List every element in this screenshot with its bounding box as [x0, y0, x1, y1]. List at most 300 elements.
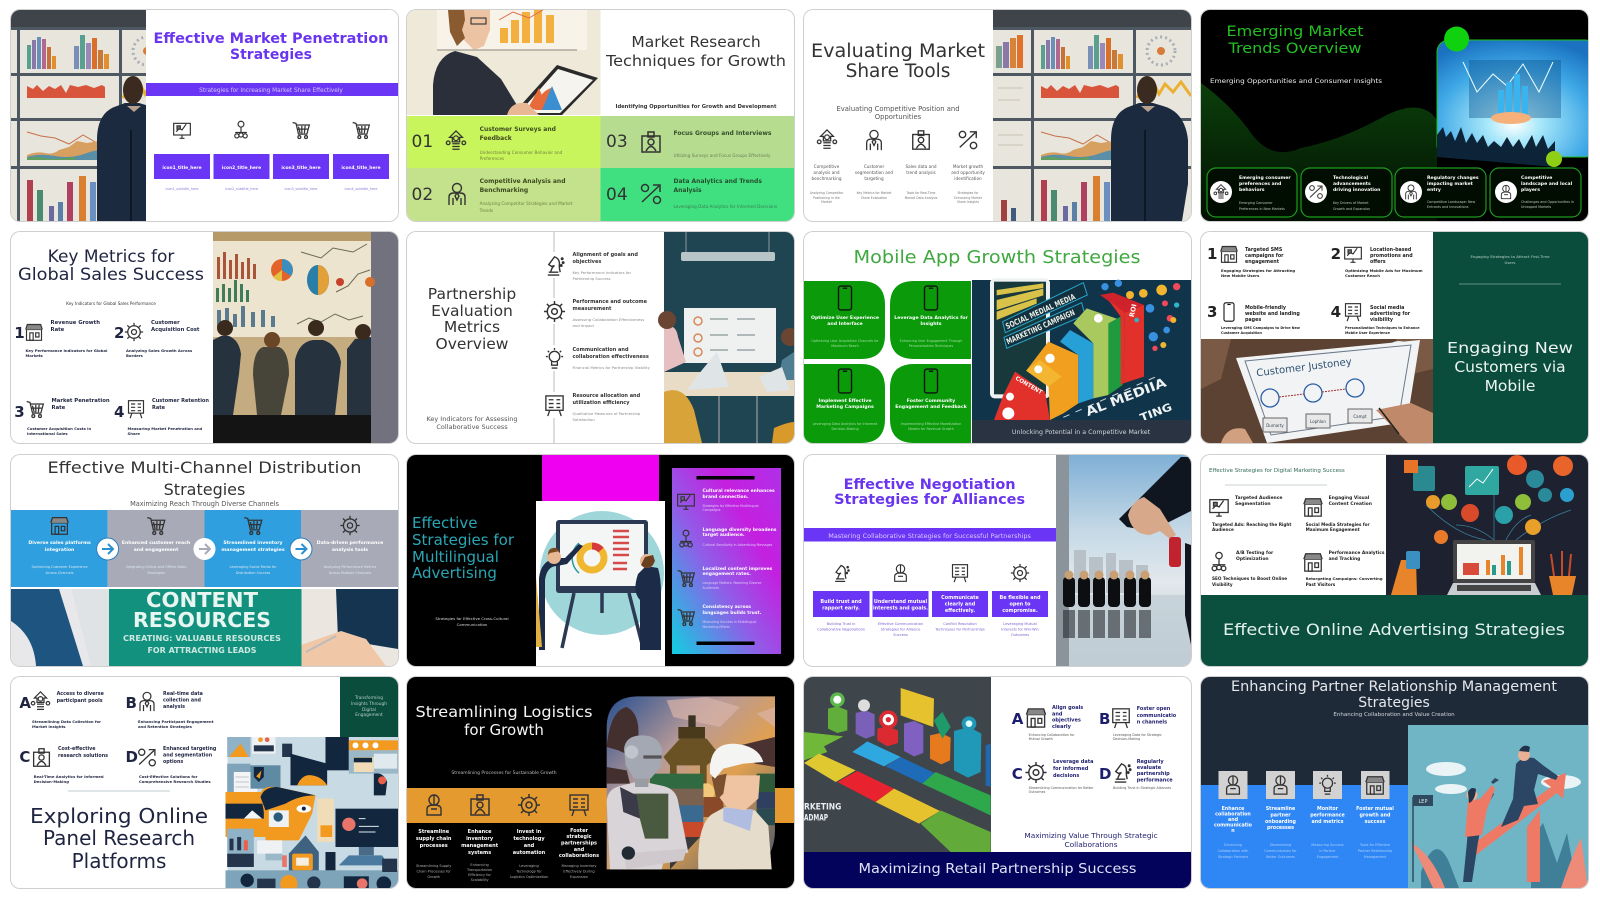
process titles: Data-driven performance	[316, 540, 383, 546]
item notes: Partnership Success	[572, 276, 611, 281]
side caption: Engaging Strategies to Attract First-Time	[1470, 254, 1550, 259]
icon tiles	[1218, 771, 1390, 799]
slide: Market Research Techniques for Growth	[407, 10, 794, 221]
item C: C	[19, 748, 30, 766]
green wave	[1201, 83, 1437, 221]
item D: Comprehensive Research Studies	[138, 779, 211, 784]
feature notes	[1239, 200, 1574, 211]
item: analytics	[1304, 550, 1385, 587]
side heading: Engaging New	[1447, 339, 1573, 357]
subheading: Enhancing Collaboration and Value Creation	[1333, 712, 1455, 718]
item 1: New Mobile Users	[1221, 273, 1260, 278]
column notes: Analyzing Competitor	[810, 191, 844, 195]
tile notes: Enhancing User Engagement Through	[900, 339, 962, 343]
metric 2: Borders	[126, 353, 143, 358]
heading	[412, 514, 515, 582]
subheading: Collaborative Success	[436, 423, 508, 431]
feature notes: Key Drivers of Market	[1333, 201, 1369, 205]
metric 1: Revenue Growth	[50, 320, 100, 326]
item D: Cost-Effective Solutions for	[138, 774, 197, 779]
item: visuals: Social Media Strategies for	[1306, 522, 1371, 527]
column notes: Share Evaluation	[861, 196, 887, 200]
subheading	[435, 616, 509, 627]
quadrant: 04: 04	[606, 185, 628, 205]
background	[407, 677, 794, 888]
panel titles	[702, 488, 777, 616]
side caption	[1470, 254, 1550, 265]
heading: Mobile App Growth Strategies	[854, 247, 1140, 268]
quadrant: 01: Understanding Consumer Behavior and	[480, 150, 563, 155]
column titles: Enhance	[468, 829, 492, 835]
content resources banner: FOR ATTRACTING LEADS	[147, 646, 256, 655]
column notes: Managing Inventory	[562, 864, 596, 868]
quadrant: 04: Analysis	[674, 187, 702, 194]
item A: and	[1052, 712, 1063, 718]
content resources banner	[108, 588, 301, 666]
panel notes: Campaigns	[702, 508, 721, 512]
heading	[1226, 24, 1364, 57]
photo: robot and engineer	[607, 696, 775, 869]
item A: Mutual Growth	[1029, 737, 1053, 741]
heading: Streamlining Logistics	[416, 703, 593, 721]
item: audience: Audience	[1212, 527, 1234, 532]
column notes: Share Insights	[957, 200, 979, 204]
item titles: utilization efficiency	[572, 400, 630, 406]
item: visuals: Maximum Engagement	[1306, 527, 1360, 532]
column titles: inventory	[466, 836, 494, 842]
slide: Effective Multi-Channel Distribution Strategies	[10, 455, 398, 666]
box labels: interests and goals.	[873, 606, 928, 612]
item: testing: Visibility	[1212, 582, 1233, 587]
quadrant: 03: 03	[606, 132, 628, 152]
photo: customer journey sheet: Customer Justoney	[1256, 357, 1352, 379]
item A: clearly	[1052, 724, 1072, 730]
item 2	[1331, 245, 1423, 278]
item: audience	[1210, 495, 1291, 532]
box subtitles	[165, 187, 377, 191]
item A	[19, 691, 104, 729]
caption: Maximizing Value Through Strategic	[1024, 831, 1158, 840]
item 2: promotions and	[1370, 253, 1413, 259]
column titles: n	[1231, 829, 1235, 834]
illustration: man with clipboard	[407, 10, 600, 115]
item C: research solutions	[58, 753, 108, 759]
item A: Market Insights	[32, 724, 66, 729]
feature titles: entry	[1427, 187, 1441, 193]
heading: for Growth	[464, 721, 544, 739]
item 2: Optimizing Mobile Ads for Maximum	[1345, 268, 1423, 273]
item C: decisions	[1053, 773, 1079, 779]
item: audience: Targeted Ads: Reaching the Right	[1212, 522, 1291, 527]
panel titles: Localized content improves	[702, 566, 773, 572]
title band	[804, 852, 1191, 888]
item C: for informed	[1053, 766, 1089, 772]
feature titles: Technological	[1333, 175, 1368, 181]
illustration: climbing the growth arrow: LEP	[1419, 799, 1427, 805]
metric 4: 4	[114, 403, 124, 421]
item 1: Targeted SMS	[1245, 247, 1283, 253]
item B: n channels	[1137, 720, 1167, 726]
metric 4: Customer Retention	[152, 398, 209, 404]
illustration: digital marketing network	[1386, 455, 1588, 595]
metric 2	[114, 320, 199, 358]
tile titles	[811, 315, 968, 410]
slide: Effective Negotiation Strategies for Alliances	[804, 455, 1191, 666]
column notes: Efficiency for	[468, 873, 492, 877]
item A: A	[1012, 710, 1024, 728]
subheading: Opportunities	[875, 113, 922, 121]
timeline with icons	[541, 232, 567, 443]
box labels: Be flexible and	[1000, 595, 1041, 601]
heading	[811, 41, 985, 82]
metric 1: Key Performance Indicators for Global	[25, 348, 107, 353]
magenta block	[542, 455, 659, 501]
feature notes: Untapped Markets	[1521, 205, 1552, 209]
process titles: Diverse sales platforms	[28, 540, 91, 546]
column titles: success	[1365, 820, 1386, 825]
illustration: social media staircase: CONTENT	[1014, 376, 1043, 396]
tile titles: Marketing Campaigns	[816, 404, 874, 410]
title band: Maximizing Retail Partnership Success	[858, 861, 1136, 877]
divider	[1225, 484, 1327, 486]
column titles: Customer	[864, 164, 884, 169]
item titles: objectives	[572, 259, 601, 265]
item notes: Key Performance Indicators for	[572, 270, 631, 275]
column notes: Tools for Real-Time	[906, 191, 936, 195]
green tiles	[804, 281, 971, 443]
item A	[1012, 705, 1083, 741]
process titles: Enhanced customer reach	[121, 540, 190, 546]
box subtitles: icon1_subtitle_here	[165, 187, 198, 191]
column notes: Enhancing	[1224, 843, 1242, 847]
item titles: Performance and outcome	[572, 299, 648, 305]
box labels: effectively.	[945, 608, 975, 614]
item titles: collaboration effectiveness	[572, 354, 649, 360]
feature titles: Competitive	[1521, 175, 1552, 181]
process notes: Integrating Online and Offline Sales	[125, 565, 186, 569]
feature notes: Emerging Consumer	[1239, 201, 1273, 205]
item 1: Engaging Strategies for Attracting	[1221, 268, 1295, 273]
quadrant: 03: Focus Groups and Interviews	[674, 130, 772, 137]
heading: Global Sales Success	[18, 265, 204, 285]
background	[1201, 10, 1588, 221]
column notes: Effectively During	[563, 870, 595, 874]
box labels: Communicate	[941, 595, 979, 601]
heading: Market Research	[631, 33, 761, 51]
column titles	[416, 828, 599, 859]
tile notes: Maximum Reach	[831, 344, 859, 348]
box notes: Effective Communication	[878, 622, 923, 626]
heading	[30, 804, 208, 873]
process titles: integration	[44, 547, 74, 553]
process titles: management strategies	[221, 547, 284, 553]
column titles: partner	[1270, 812, 1291, 818]
item B: and Retention Strategies	[138, 724, 192, 729]
item 1: campaigns for	[1245, 253, 1284, 259]
box notes	[817, 622, 1039, 637]
item B: B	[1099, 710, 1110, 728]
item B: Leveraging Data for Strategic	[1113, 733, 1162, 737]
column notes: Collaboration with	[1218, 849, 1248, 853]
column titles: Sales data and	[905, 164, 937, 169]
item C	[19, 746, 108, 784]
column notes	[1218, 843, 1392, 859]
item C: Streamlining Communication for Better	[1029, 786, 1094, 790]
column titles: partnerships	[561, 840, 597, 846]
item A: A	[19, 694, 31, 712]
heading	[416, 703, 593, 739]
column titles: processes	[1267, 825, 1294, 831]
item D: performance	[1137, 778, 1173, 784]
column titles: Streamline	[1266, 806, 1296, 812]
slide: Effective Strategies for Multilingual Advertising	[407, 455, 794, 666]
heading: Platforms	[71, 849, 166, 873]
column titles: segmentation and	[855, 170, 893, 175]
item B: collection and	[162, 698, 201, 704]
title band	[1201, 595, 1588, 666]
title band: Effective Online Advertising Strategies	[1223, 620, 1565, 639]
quadrant: 02: Analyzing Competitor Strategies and Market	[480, 201, 573, 206]
column titles: and	[524, 843, 535, 849]
box notes: Strategies for Alliance	[881, 628, 921, 632]
box notes: Leveraging Mutual	[1003, 622, 1037, 626]
box labels: Understand mutual	[874, 599, 927, 605]
column titles: benchmarking	[811, 176, 842, 181]
column titles: Monitor	[1317, 806, 1339, 812]
metric 4: Measuring Market Penetration and	[127, 426, 202, 431]
item B	[1099, 706, 1177, 741]
column titles: Enhance	[1222, 806, 1245, 812]
illustration: marketing roadmap: RKETING	[804, 803, 841, 813]
orange band	[407, 788, 794, 823]
heading	[153, 31, 388, 63]
heading	[1231, 679, 1558, 711]
caption	[1024, 831, 1158, 849]
process titles: analysis tools	[331, 547, 368, 553]
item: audience: Targeted Audience	[1235, 495, 1282, 501]
item A: Access to diverse	[56, 691, 104, 697]
item B: Enhancing Participant Engagement	[138, 719, 213, 724]
box notes: Collaborative Negotiations	[817, 628, 865, 632]
item 1: engagement	[1245, 259, 1280, 265]
feature titles	[1239, 175, 1573, 193]
metric 3: Customer Acquisition Costs in	[26, 426, 91, 431]
item: visuals	[1304, 495, 1372, 532]
column titles: onboarding	[1265, 819, 1297, 825]
item C	[1012, 759, 1094, 794]
divider	[68, 790, 170, 792]
panel titles: target audience.	[702, 532, 745, 538]
item 3: Customer Acquisition	[1221, 331, 1262, 335]
item notes: and Impact	[572, 323, 594, 328]
column notes	[416, 863, 596, 882]
subtitle band: Mastering Collaborative Strategies for Successful Partnerships	[828, 532, 1032, 540]
subheading: Key Indicators for Global Sales Performance	[66, 301, 156, 306]
column notes: Tools for Effective	[1359, 843, 1390, 847]
item 2: Customer Reach	[1345, 273, 1380, 278]
photo: customer journey sheet: Dumarty	[1266, 423, 1284, 428]
illustration: research collage	[225, 737, 400, 892]
quadrant: 01: Preferences	[480, 156, 504, 161]
panel notes: Marketing Efforts	[702, 625, 730, 629]
side note block: Engagement	[355, 712, 383, 718]
side heading: Mobile	[1485, 377, 1535, 395]
slide: Maximizing Retail Partnership Success	[804, 677, 1191, 888]
band icons	[427, 794, 588, 816]
feature titles: driving innovation	[1333, 187, 1380, 193]
item A: Align goals	[1052, 705, 1083, 711]
purple boxes	[813, 591, 1048, 617]
heading: Evaluation	[431, 302, 513, 320]
item notes: Assessing Collaboration Effectiveness	[572, 317, 644, 322]
heading: Effective Market Penetration	[153, 31, 388, 47]
process notes	[31, 565, 376, 575]
column titles: systems	[468, 850, 491, 856]
item D	[1099, 759, 1173, 790]
tile notes: Personalization Techniques	[909, 344, 953, 348]
item 3: Leveraging SMS Campaigns to Drive New	[1221, 326, 1301, 330]
heading: Evaluating Market	[811, 41, 985, 62]
column titles: strategic	[566, 834, 592, 840]
panel titles: engagement rates.	[702, 571, 751, 577]
column titles: automation	[513, 850, 546, 856]
panel notes	[702, 504, 773, 629]
box notes: Conflict Resolution	[943, 622, 977, 626]
subheading	[426, 415, 518, 431]
photo: customer journey sheet	[1201, 339, 1433, 443]
panel notes: Strategies for Effective Multilingual	[702, 504, 759, 508]
gradient panel	[672, 468, 781, 654]
item: visuals: Engaging Visual	[1329, 495, 1370, 501]
metric 4: Share	[127, 431, 140, 436]
subtitle band: Strategies for Increasing Market Share Effectively	[199, 88, 343, 94]
box labels: icon4_title_here	[341, 165, 380, 171]
item: analytics: and Tracking	[1329, 556, 1360, 562]
item B: Decision-Making	[1113, 737, 1140, 741]
panel notes: Language Matters: Reaching Diverse	[702, 581, 761, 585]
process notes: Optimizing Customer Experience	[31, 565, 87, 569]
process notes: Strategies	[147, 571, 164, 575]
feature icons	[1210, 181, 1517, 203]
feature notes: Preferences in New Markets	[1239, 207, 1285, 211]
purple title boxes	[154, 154, 388, 179]
item D	[125, 746, 216, 784]
content resources banner: CONTENT	[146, 588, 258, 612]
quadrant: 01: 01	[412, 132, 433, 152]
illustration: social media staircase: TING	[1138, 400, 1174, 424]
column notes: Streamlining Supply	[416, 864, 451, 868]
process titles	[28, 540, 383, 553]
item 4: Social media	[1370, 305, 1404, 311]
heading: Strategies	[230, 47, 311, 63]
slide: Partnership Evaluation Metrics Overview	[407, 232, 794, 443]
subheading: Streamlining Processes for Sustainable Growth	[451, 770, 557, 776]
slide: Effective Market Penetration Strategies	[10, 10, 398, 221]
image: crowd and rising chart	[1437, 40, 1597, 167]
metric 3: International Sales	[26, 431, 68, 436]
photo: customer journey sheet: Lophlon	[1310, 419, 1326, 424]
tile titles: Leverage Data Analytics for	[894, 315, 968, 321]
process notes: Leveraging Social Media for	[229, 565, 277, 569]
side note block: Insights Through	[350, 701, 387, 707]
column notes: Key Metrics for Market	[857, 191, 892, 195]
column notes: Scalability	[471, 878, 489, 882]
subheading: Identifying Opportunities for Growth and Development	[616, 104, 777, 110]
heading: Share Tools	[846, 61, 950, 82]
feature notes: Competitive Landscape: New	[1427, 200, 1475, 204]
metric 3	[14, 398, 109, 436]
content resources banner: CREATING: VALUABLE RESOURCES	[122, 634, 280, 643]
heading	[47, 458, 361, 499]
slide: Enhancing Partner Relationship Management Strategies	[1201, 677, 1588, 888]
item D: options	[162, 759, 183, 765]
subheading	[836, 105, 960, 121]
item: testing: SEO Techniques to Boost Online	[1212, 576, 1287, 581]
tile notes: Implementing Effective Monetization	[901, 422, 961, 426]
item 3	[1207, 303, 1301, 335]
item B: analysis	[162, 704, 185, 710]
caption: Collaborations	[1064, 840, 1118, 849]
box labels: Build trust and	[820, 599, 862, 605]
photo: desk and pen	[10, 589, 398, 666]
column titles: Market growth	[953, 164, 983, 169]
background	[407, 455, 794, 666]
column titles: communicatio	[1214, 822, 1253, 828]
column notes: Better Outcomes	[1266, 855, 1295, 859]
column notes: Communication for	[1264, 849, 1297, 853]
column notes: Management	[1364, 855, 1387, 859]
box notes: Techniques for Partnerships	[934, 628, 985, 632]
tile notes: Leveraging Data Analytics for Informed	[813, 422, 877, 426]
column notes: Engagement	[1317, 855, 1339, 859]
icons row	[835, 564, 1029, 582]
column titles: processes	[420, 843, 448, 849]
column titles: Streamline	[418, 829, 450, 835]
slide: Mobile App Growth Strategies	[804, 232, 1191, 443]
item notes: Financial Metrics for Partnership Viability	[572, 365, 651, 370]
item 4	[1331, 303, 1420, 335]
item 3: pages	[1245, 318, 1261, 323]
item C: C	[1012, 765, 1023, 783]
quadrant: 01: Feedback	[480, 135, 513, 142]
item A: participant pools	[56, 698, 102, 704]
metric 3: Rate	[51, 405, 65, 411]
heading: Effective Multi-Channel Distribution	[47, 458, 361, 477]
column titles: identification	[954, 176, 982, 181]
caption: Effective Strategies for Digital Marketing Success	[1209, 468, 1345, 474]
box subtitles: icon3_subtitle_here	[284, 187, 317, 191]
metric 4	[114, 398, 209, 436]
slide: Effective Online Advertising Strategies	[1201, 455, 1588, 666]
item D: Regularly	[1137, 759, 1164, 765]
item 4: 4	[1331, 303, 1341, 321]
quadrant: 03	[600, 116, 794, 168]
tile notes: Optimizing User Acquisition Channels for	[811, 339, 879, 343]
icons row	[173, 121, 369, 138]
feature titles: advancements	[1333, 181, 1371, 187]
column notes: Transportation	[466, 868, 492, 872]
item 2: 2	[1331, 245, 1341, 263]
item B: Real-time data	[162, 691, 202, 697]
box subtitles: icon4_subtitle_here	[344, 187, 377, 191]
side panel	[1433, 232, 1588, 443]
column notes	[810, 191, 983, 204]
quadrant: 01	[407, 116, 600, 168]
item: testing: Optimization	[1236, 556, 1269, 562]
slide: Streamlining Logistics for Growth	[407, 677, 794, 888]
caption band	[972, 420, 1191, 443]
item D: Building Trust in Strategic Alliances	[1113, 786, 1171, 790]
